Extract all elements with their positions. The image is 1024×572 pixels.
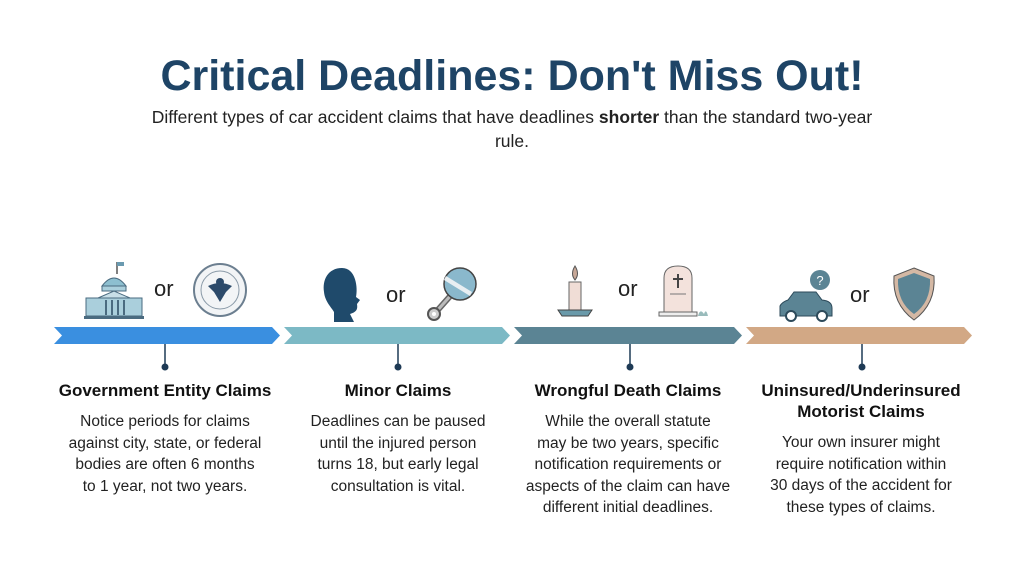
panel: government entity claims: Government Entity Claims bbox=[59, 381, 271, 400]
panel: government entity claims: to 1 year, not two years. bbox=[83, 478, 247, 494]
panel: wrongful death claims: different initial deadlines. bbox=[543, 499, 713, 516]
panel: government entity claims: against city, state, or federal bbox=[69, 434, 261, 452]
panel: minor claims: consultation is vital. bbox=[331, 478, 465, 494]
panel: government entity claims bbox=[59, 381, 271, 494]
or text 2: or bbox=[386, 282, 406, 307]
panel: minor claims: Minor Claims bbox=[345, 381, 451, 400]
panel: wrongful death claims: notification requirements or bbox=[535, 456, 721, 473]
icon: car with question bbox=[780, 270, 832, 322]
icon: rattle bbox=[427, 267, 477, 321]
panel: wrongful death claims: While the overall statute bbox=[545, 413, 711, 430]
panel: government entity claims: Notice periods for claims bbox=[80, 413, 250, 430]
subtitle: Different types of car accident claims that have deadlines shorter than the standard two-year bbox=[152, 107, 872, 127]
panel: uninsured motorist claims: these types of claims. bbox=[786, 498, 936, 516]
panel: uninsured motorist claims: Your own insurer might bbox=[782, 434, 940, 451]
or text 4: or bbox=[850, 282, 870, 307]
panel: minor claims: Deadlines can be paused bbox=[311, 413, 485, 430]
panel: uninsured motorist claims: 30 days of the accident for bbox=[770, 477, 952, 494]
panel: wrongful death claims: aspects of the claim can have bbox=[526, 478, 730, 494]
icon: gravestone bbox=[658, 266, 708, 316]
icon: candle bbox=[557, 265, 593, 316]
panel: uninsured motorist claims bbox=[761, 381, 961, 516]
panel: minor claims: until the injured person bbox=[320, 434, 476, 452]
panel: wrongful death claims: Wrongful Death Claims bbox=[535, 381, 721, 400]
title: Critical Deadlines: Don't Miss Out! bbox=[160, 52, 864, 100]
subtitle: rule. bbox=[495, 131, 529, 151]
panel: uninsured motorist claims: require notification within bbox=[776, 456, 946, 472]
panel: uninsured motorist claims: Motorist Claims bbox=[797, 402, 925, 421]
icon: seal bbox=[193, 263, 247, 317]
icon: shield bbox=[893, 268, 935, 320]
or text 1: or bbox=[154, 276, 174, 301]
or text 3: or bbox=[618, 276, 638, 301]
icon: capitol building bbox=[84, 262, 144, 319]
panel: government entity claims: bodies are often 6 months bbox=[75, 456, 255, 473]
panel: wrongful death claims: may be two years, specific bbox=[537, 434, 719, 452]
icon: car with question: ? bbox=[816, 273, 824, 288]
panel: wrongful death claims bbox=[526, 381, 730, 516]
subtitle bbox=[152, 107, 872, 151]
panel: minor claims bbox=[311, 381, 485, 494]
panel: uninsured motorist claims: Uninsured/Underinsured bbox=[761, 381, 961, 400]
panel: minor claims: turns 18, but early legal bbox=[317, 456, 479, 473]
icon: child head bbox=[324, 268, 360, 322]
